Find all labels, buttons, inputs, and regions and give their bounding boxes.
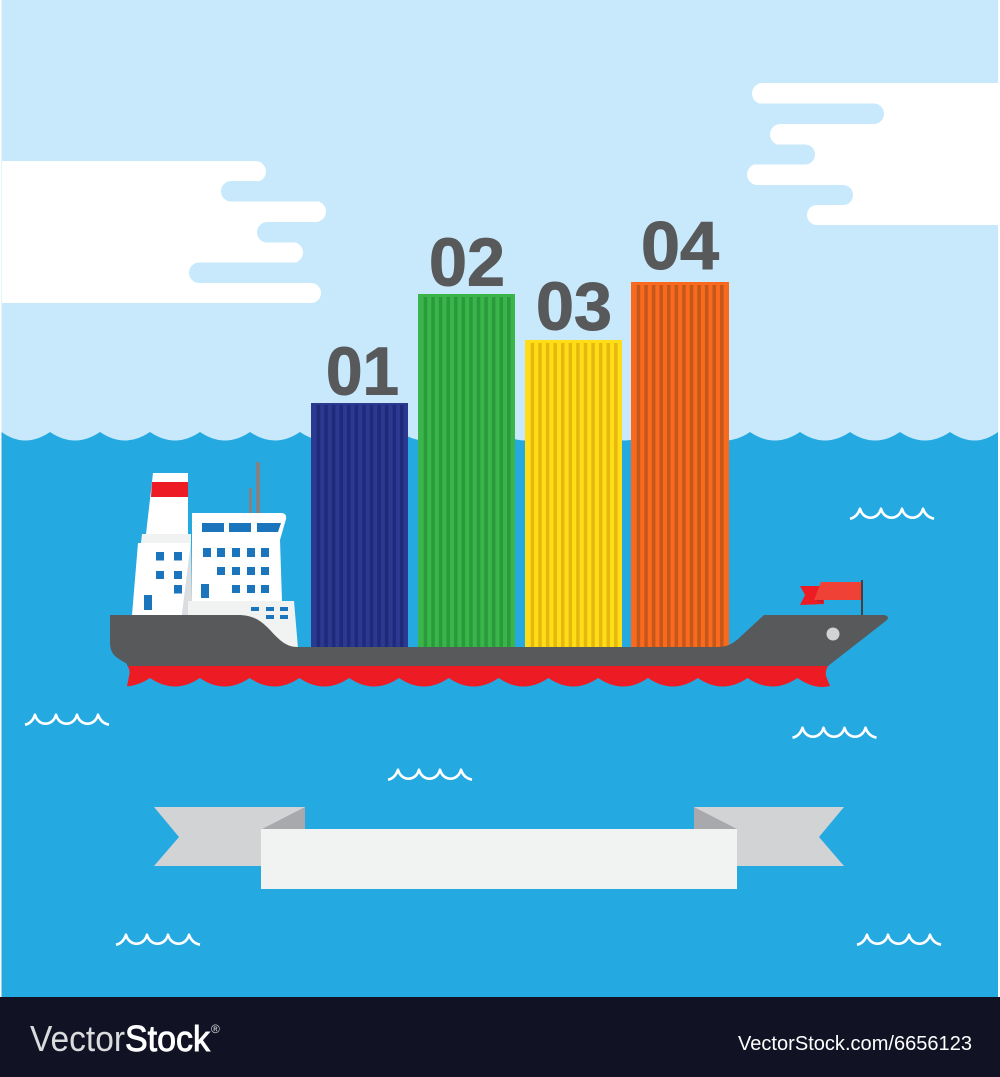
container 03: yellow <box>525 340 622 647</box>
number labels: 01 <box>326 334 399 410</box>
ribbon banner <box>154 807 844 889</box>
cloud: right <box>740 83 998 225</box>
funnel <box>146 473 188 534</box>
number labels: 04 <box>641 208 719 284</box>
footer logo: Stock <box>125 1018 211 1059</box>
number labels: 03 <box>536 268 612 344</box>
number labels: 02 <box>429 224 505 300</box>
ship superstructure <box>132 462 298 648</box>
lower deck block <box>188 601 298 648</box>
footer bar <box>0 997 1000 1077</box>
flag <box>800 580 863 615</box>
footer logo: Vector <box>30 1018 125 1059</box>
ship hull: grey body <box>110 615 888 666</box>
sea <box>2 432 998 997</box>
ship hull: red waterline <box>127 665 830 687</box>
porthole <box>826 628 840 640</box>
sky background <box>2 0 998 445</box>
masts <box>249 462 260 514</box>
footer logo: ® <box>211 1022 220 1036</box>
rear block <box>132 534 192 615</box>
footer image id: VectorStock.com/6656123 <box>738 1032 972 1055</box>
container 02: green <box>418 294 515 647</box>
bridge block <box>192 513 286 601</box>
footer logo <box>30 1018 220 1059</box>
number labels <box>326 208 719 410</box>
small waves <box>25 509 941 945</box>
cloud: left <box>2 161 347 303</box>
container 01: navy <box>311 403 408 647</box>
container 04: orange <box>631 282 729 647</box>
